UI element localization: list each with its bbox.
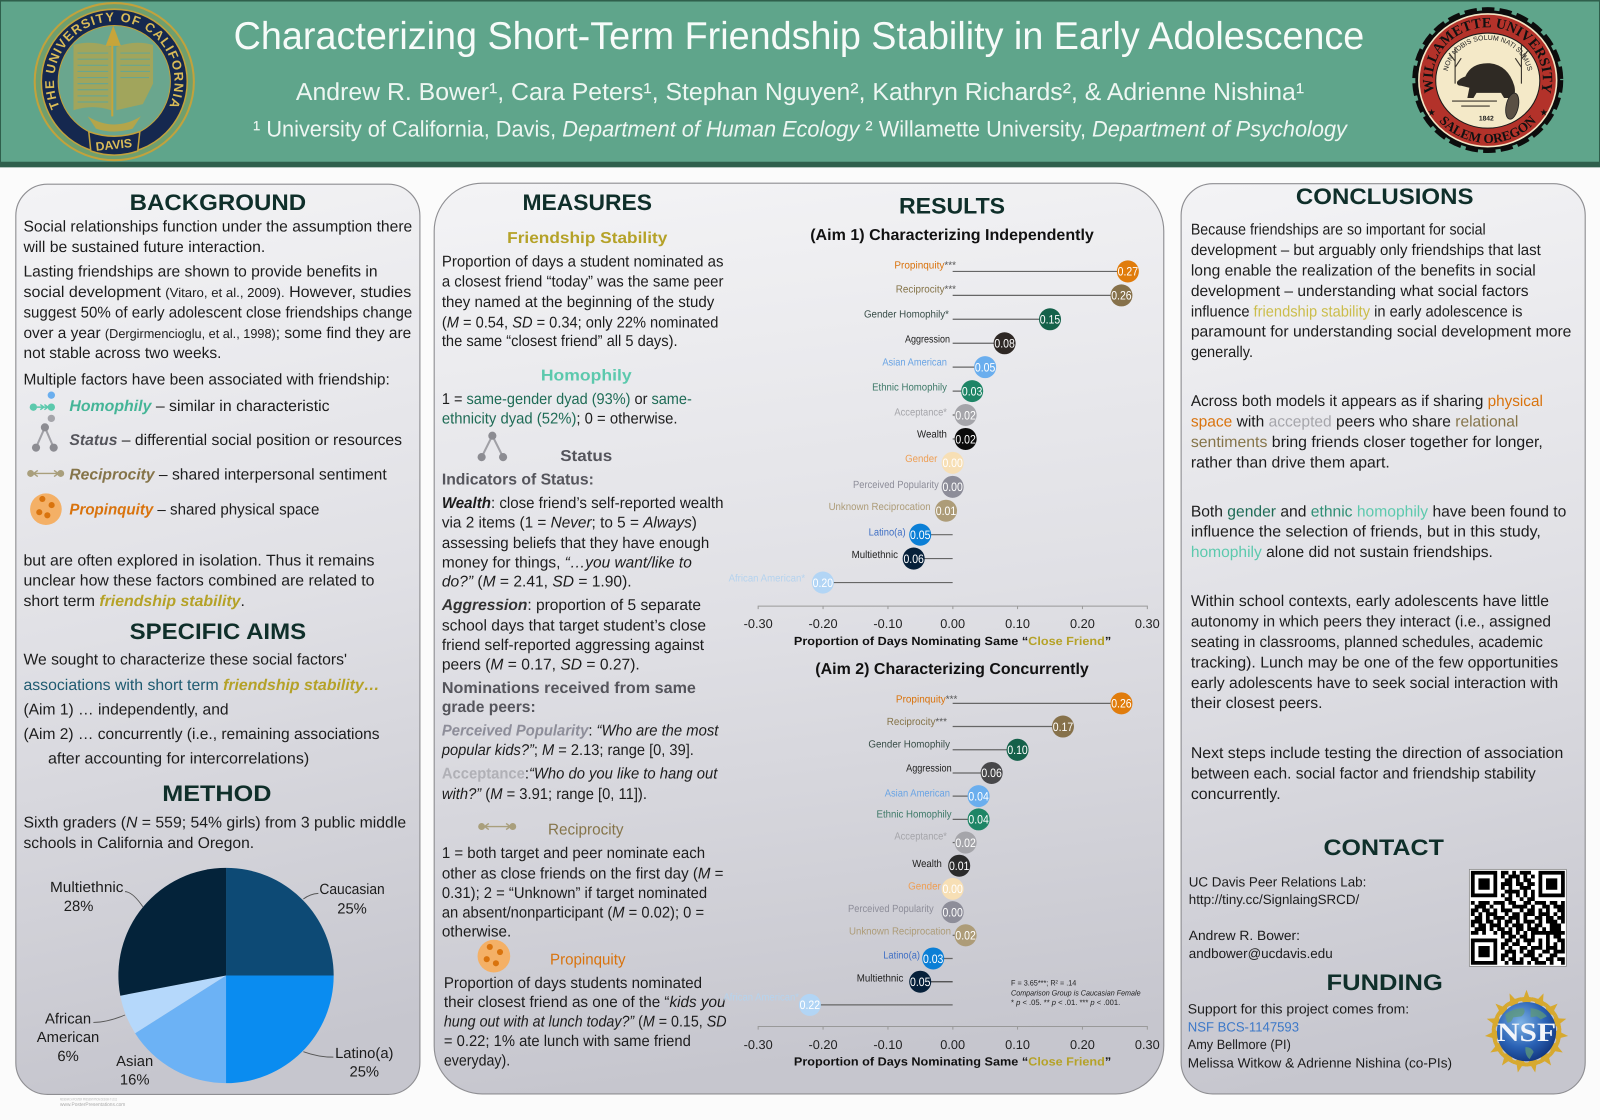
text: status indicators: popular kids?”; M = 2.13; range [0, 39]. xyxy=(441,742,694,759)
text: conclusion 2: sentiments bring friends closer together for longer, xyxy=(1191,434,1543,451)
text: friendship stability xyxy=(442,253,724,350)
pie labels: 6% xyxy=(57,1049,79,1065)
text: conclusion 2: rather than drive them apart. xyxy=(1191,454,1390,471)
text: status indicators: Indicators of Status: xyxy=(442,471,594,489)
text: conclusion 5: concurrently. xyxy=(1191,786,1281,803)
sub-heading: friendship stability: Friendship Stability xyxy=(507,230,668,247)
text: conclusion 2 xyxy=(1191,393,1543,471)
row: reciprocity: Reciprocity*** xyxy=(887,717,947,728)
heading: aim 1 chart: (Aim 1) Characterizing Independently xyxy=(810,227,1094,244)
text: friendship stability: (M = 0.54, SD = 0.34; only 22% nominated xyxy=(442,314,718,332)
row: propinquity: Propinquity*** xyxy=(894,261,956,272)
text: status indicators: money for things, “…you want/like to xyxy=(442,554,692,571)
logo: Willamette University seal: NON NOBIS SOLUM NATI SUMUS xyxy=(1443,35,1532,71)
text: conclusion 5: between each. social factor and friendship stability xyxy=(1191,765,1536,783)
panel: right column xyxy=(1181,184,1585,1094)
text: reciprocity: an absent/nonparticipant (M = 0.02); 0 = xyxy=(442,904,704,921)
footer credit xyxy=(60,1097,125,1108)
row: asian american xyxy=(882,356,996,378)
x axis aim 1: 0.00 xyxy=(940,617,965,631)
text: method xyxy=(23,814,406,852)
pie labels: American xyxy=(37,1030,99,1046)
row: ethnic homophily: 0.03 xyxy=(962,384,983,398)
x axis aim 1: 0.30 xyxy=(1135,617,1160,631)
row: perceived popularity xyxy=(853,476,964,498)
text: conclusion 3: Both gender and ethnic homophily have been found to xyxy=(1191,503,1566,520)
row: acceptance xyxy=(894,832,977,854)
text: conclusion 1 xyxy=(1191,221,1571,361)
logo: Willamette University seal: ★ xyxy=(1428,107,1436,117)
text: propinquity: everyday). xyxy=(444,1052,510,1069)
x axis aim 2: Proportion of Days Nominating Same “ Close Friend ” xyxy=(794,1056,1111,1068)
text: background paragraphs: will be sustained future interaction. xyxy=(22,239,265,256)
row: wealth xyxy=(912,855,970,877)
row: wealth: Wealth xyxy=(917,429,947,440)
factor: reciprocity: Reciprocity – shared interpersonal sentiment xyxy=(69,466,387,484)
text: background paragraphs: social development (Vitaro, et al., 2009). However, studies xyxy=(23,284,412,301)
text: conclusion 4: autonomy in which peers they interact (i.e., assigned xyxy=(1191,613,1551,631)
logo: Willamette University seal: WILLAMETTE UNIVERSITY xyxy=(1422,18,1552,94)
text: conclusion 1: development – but arguably only friendships that last xyxy=(1191,242,1542,259)
chart: aim 1 lollipop xyxy=(729,260,1160,648)
text: propinquity: Proportion of days students nominated xyxy=(444,974,702,992)
row: unknown reciprocation: Unknown Reciprocation xyxy=(849,926,951,938)
x axis aim 2: -0.10 xyxy=(873,1038,903,1052)
text: propinquity: their closest friend as one of the “kids you xyxy=(444,994,726,1011)
text: conclusion 1: paramount for understanding social development more xyxy=(1191,323,1571,341)
text: funding details xyxy=(1188,1001,1452,1070)
slice: Multiethnic xyxy=(118,868,226,996)
heading: funding: FUNDING xyxy=(1327,969,1443,995)
row: latino xyxy=(869,524,953,546)
text: method: Sixth graders (N = 559; 54% girls) from 3 public middle xyxy=(23,814,406,832)
text: status indicators xyxy=(441,471,723,803)
row: perceived popularity: 0.00 xyxy=(942,480,963,494)
text: background paragraphs xyxy=(22,218,412,389)
pie labels: Multiethnic xyxy=(50,880,123,896)
row: african american: African American* xyxy=(723,992,799,1004)
text: funding details: NSF BCS-1147593 xyxy=(1188,1019,1299,1035)
icon: reciprocity arrows xyxy=(478,823,516,830)
text: conclusion 4 xyxy=(1191,593,1559,712)
text: status indicators: Aggression: proportion of 5 separate xyxy=(441,597,701,614)
pie labels: 16% xyxy=(120,1072,150,1089)
text: background paragraphs: suggest 50% of early adolescent close friendships change xyxy=(23,304,412,321)
row: reciprocity: 0.26 xyxy=(1111,288,1132,303)
row: acceptance: 0.02 xyxy=(955,408,976,422)
logo: Willamette University seal: ★ xyxy=(1540,107,1548,117)
text: isolation statement: but are often explored in isolation. Thus it remains xyxy=(23,552,375,569)
text: status indicators: school days that target student’s close xyxy=(442,617,706,635)
row: reciprocity: Reciprocity*** xyxy=(896,284,956,296)
row: gender homophily xyxy=(864,308,1061,330)
text: conclusion 4: seating in classrooms, planned schedules, academic xyxy=(1191,634,1543,651)
row: ethnic homophily xyxy=(877,808,990,830)
logo: Willamette University seal: SALEM OREGON xyxy=(1440,115,1536,143)
text: reciprocity xyxy=(442,845,724,941)
pie labels: African xyxy=(45,1011,91,1028)
row: ethnic homophily: 0.04 xyxy=(968,812,989,827)
text: contact details: andbower@ucdavis.edu xyxy=(1189,946,1333,961)
text: conclusion 3: homophily alone did not sustain friendships. xyxy=(1191,544,1493,561)
text: specific aims: We sought to characterize these social factors' xyxy=(23,651,347,668)
row: african american: 0.22 xyxy=(800,998,820,1012)
row: multiethnic: 0.06 xyxy=(903,552,924,566)
row: gender homophily: Gender Homophily xyxy=(868,739,951,750)
row: asian american: 0.05 xyxy=(975,360,996,374)
text: funding details: Amy Bellmore (PI) xyxy=(1188,1037,1291,1052)
text: homophily xyxy=(442,391,692,428)
row: acceptance: Acceptance* xyxy=(894,832,947,843)
row: aggression: Aggression xyxy=(905,334,950,345)
text: background paragraphs: over a year (Dergirmencioglu, et al., 1998); some find they are xyxy=(23,324,411,342)
text: conclusion 2: space with accepted peers who share relational xyxy=(1191,413,1518,431)
text: background paragraphs: Social relationships function under the assumption there xyxy=(23,218,412,236)
text: friendship stability: Proportion of days a student nominated as xyxy=(442,253,724,270)
text: funding details: Support for this project comes from: xyxy=(1188,1001,1409,1016)
x axis aim 2: -0.30 xyxy=(744,1038,773,1052)
logo: UC Davis seal xyxy=(34,2,195,162)
text: conclusion 1: development – understanding what social factors xyxy=(1191,283,1529,300)
row: aggression: Aggression xyxy=(906,763,952,774)
model statistics note xyxy=(1011,979,1141,1007)
text: status indicators: do?” (M = 2.41, SD = 1.90). xyxy=(442,573,632,591)
slice: Latino(a) xyxy=(226,976,334,1083)
x axis aim 1: -0.30 xyxy=(744,617,773,631)
panel: left column xyxy=(16,184,420,1094)
row: propinquity xyxy=(894,260,1139,282)
logo: NSF xyxy=(1484,990,1569,1074)
text: status indicators: Wealth: close friend’s self-reported wealth xyxy=(442,495,723,512)
row: gender: Gender xyxy=(908,882,941,893)
row: gender homophily: Gender Homophily* xyxy=(864,309,949,321)
row: african american xyxy=(729,572,953,594)
row: asian american: Asian American xyxy=(885,788,950,799)
text: status indicators: assessing beliefs that they have enough xyxy=(442,535,709,552)
text: status indicators: Perceived Popularity: “Who are the most xyxy=(442,722,719,740)
row: gender xyxy=(905,452,964,474)
text: method: schools in California and Oregon. xyxy=(23,835,254,852)
row: wealth: 0.01 xyxy=(949,859,970,873)
text: conclusion 4: Within school contexts, early adolescents have little xyxy=(1191,593,1549,610)
row: gender: 0.00 xyxy=(942,456,963,470)
text: contact details xyxy=(1189,874,1366,961)
title: Characterizing Short-Term Friendship Stability in Early Adolescence xyxy=(234,15,1364,58)
row: african american: African American* xyxy=(729,573,805,585)
icon: status tree xyxy=(32,423,58,452)
text: isolation statement: short term friendship stability. xyxy=(23,593,245,610)
row: gender: Gender xyxy=(905,454,938,465)
row: gender: 0.00 xyxy=(942,882,963,896)
text: conclusion 1: generally. xyxy=(1191,344,1253,361)
text: status indicators: with?” (M = 3.91; range [0, 11]). xyxy=(442,786,647,803)
sub-heading: homophily: Homophily xyxy=(541,367,632,385)
row: latino: 0.05 xyxy=(910,528,931,542)
text: conclusion 4: their closest peers. xyxy=(1191,695,1322,712)
x axis aim 1: Proportion of Days Nominating Same “ Close Friend ” xyxy=(794,636,1111,648)
text: status indicators: peers (M = 0.17, SD = 0.27). xyxy=(442,656,640,673)
row: latino: Latino(a) xyxy=(883,951,920,962)
icon: propinquity circle xyxy=(478,940,510,972)
factor: status xyxy=(32,423,402,452)
text: propinquity: = 0.22; 1% ate lunch with same friend xyxy=(444,1033,691,1050)
text: reciprocity: other as close friends on the first day (M = xyxy=(442,865,724,883)
row: gender homophily: 0.10 xyxy=(1007,743,1028,757)
pie labels: Caucasian xyxy=(319,882,385,898)
heading: contact: CONTACT xyxy=(1323,835,1444,860)
row: reciprocity: 0.17 xyxy=(1053,720,1073,734)
text: homophily: ethnicity dyad (52%); 0 = otherwise. xyxy=(442,410,678,428)
x axis aim 2: 0.30 xyxy=(1135,1038,1160,1052)
row: propinquity: 0.27 xyxy=(1118,264,1138,279)
row: ethnic homophily xyxy=(872,380,983,402)
logo: UC Davis seal: THE UNIVERSITY OF CALIFORNIA xyxy=(45,12,184,110)
row: unknown reciprocation xyxy=(849,924,977,946)
text: friendship stability: a closest friend “today” was the same peer xyxy=(442,273,723,291)
row: perceived popularity: 0.00 xyxy=(942,905,963,919)
text: friendship stability: the same “closest friend” all 5 days). xyxy=(442,333,678,350)
heading: conclusions: CONCLUSIONS xyxy=(1296,184,1473,209)
model statistics note: F = 3.65***; R² = .14 xyxy=(1011,979,1076,988)
row: perceived popularity: Perceived Popularity xyxy=(848,904,935,915)
text: conclusion 5 xyxy=(1191,745,1563,803)
row: aggression xyxy=(906,762,1003,784)
text: conclusion 1: long enable the realization of the benefits in social xyxy=(1191,262,1536,280)
text: status indicators: via 2 items (1 = Never; to 5 = Always) xyxy=(442,514,697,532)
slice: African American xyxy=(120,976,226,1033)
text: propinquity xyxy=(444,974,727,1069)
heading: method: METHOD xyxy=(162,781,271,806)
pie labels: Asian xyxy=(116,1054,153,1070)
row: propinquity: Propinquity*** xyxy=(896,694,957,706)
row: acceptance: Acceptance* xyxy=(894,407,947,418)
text: specific aims xyxy=(23,651,380,767)
heading: aim 2 chart: (Aim 2) Characterizing Concurrently xyxy=(815,661,1089,678)
icon: propinquity circle xyxy=(30,493,62,525)
x axis aim 1: -0.10 xyxy=(873,617,903,631)
row: ethnic homophily: Ethnic Homophily xyxy=(872,382,948,393)
row: unknown reciprocation xyxy=(829,500,957,522)
text: conclusion 3: influence the selection of friends, but in this study, xyxy=(1191,523,1541,541)
affiliations: ¹ University of California, Davis, Department of Human Ecology ² Willamette University, Department of Psychology xyxy=(253,116,1349,142)
row: aggression: 0.06 xyxy=(981,766,1002,780)
row: asian american: 0.04 xyxy=(968,789,989,803)
row: acceptance xyxy=(894,404,977,426)
x axis aim 1: 0.20 xyxy=(1070,617,1095,631)
footer credit: www.PosterPresentations.com xyxy=(60,1102,125,1108)
text: contact details: Andrew R. Bower: xyxy=(1189,928,1300,943)
text: specific aims: associations with short term friendship stability… xyxy=(23,677,380,694)
chart: aim 2 lollipop xyxy=(723,692,1160,1068)
row: latino: Latino(a) xyxy=(869,528,906,539)
text: funding details: Melissa Witkow & Adrienne Nishina (co-PIs) xyxy=(1188,1055,1452,1070)
row: multiethnic: Multiethnic xyxy=(857,973,903,985)
text: conclusion 3 xyxy=(1191,503,1566,561)
model statistics note: * p < .05. ** p < .01. *** p < .001. xyxy=(1011,998,1120,1007)
text: isolation statement: unclear how these factors combined are related to xyxy=(23,572,374,590)
factor: propinquity xyxy=(30,493,319,525)
icon: homophily dots xyxy=(30,392,55,422)
x axis aim 1: 0.10 xyxy=(1005,617,1030,631)
text: status indicators: Nominations received from same xyxy=(442,680,696,697)
text: conclusion 4: early adolescents have to seek social interaction with xyxy=(1191,674,1558,692)
row: asian american: Asian American xyxy=(882,357,947,368)
text: background paragraphs: Multiple factors have been associated with friendship: xyxy=(23,371,390,389)
row: ethnic homophily: Ethnic Homophily xyxy=(877,809,952,821)
row: propinquity: 0.26 xyxy=(1111,696,1132,711)
factor: status: Status – differential social position or resources xyxy=(69,432,402,449)
row: latino xyxy=(883,947,953,969)
logo: NSF: NSF xyxy=(1497,1017,1556,1047)
text: conclusion 1: Because friendships are so important for social xyxy=(1191,221,1486,239)
authors: Andrew R. Bower¹, Cara Peters¹, Stephan Nguyen², Kathryn Richards², & Adrienne Nishina¹ xyxy=(296,79,1304,106)
heading: background: BACKGROUND xyxy=(130,190,306,215)
row: multiethnic: Multiethnic xyxy=(852,550,898,561)
icon: status tree xyxy=(478,432,507,461)
factor: homophily xyxy=(30,392,330,422)
heading: measures: MEASURES xyxy=(522,190,652,215)
icon: QR code xyxy=(1469,869,1566,966)
text: conclusion 5: Next steps include testing the direction of association xyxy=(1191,745,1563,762)
row: reciprocity xyxy=(896,284,1132,306)
text: status indicators: friend self-reported aggressing against xyxy=(442,637,705,654)
sub-heading: reciprocity: Reciprocity xyxy=(548,821,624,839)
x axis aim 1: -0.20 xyxy=(809,617,838,631)
text: conclusion 2: Across both models it appears as if sharing physical xyxy=(1191,393,1543,410)
text: reciprocity: 0.31); 2 = “Unknown” if target nominated xyxy=(442,885,707,902)
panel: measures and results xyxy=(434,183,1164,1094)
x axis aim 2: 0.00 xyxy=(940,1038,965,1052)
icon: reciprocity arrows xyxy=(27,470,64,477)
row: multiethnic xyxy=(857,971,953,993)
text: specific aims: (Aim 2) … concurrently (i.e., remaining associations xyxy=(23,726,380,743)
sub-heading: propinquity: Propinquity xyxy=(550,951,626,968)
row: latino: 0.03 xyxy=(923,952,944,966)
text: specific aims: (Aim 1) … independently, and xyxy=(23,701,229,718)
text: reciprocity: 1 = both target and peer nominate each xyxy=(442,845,705,862)
text: status indicators: Acceptance:“Who do you like to hang out xyxy=(442,765,718,783)
pie chart: ethnicity xyxy=(37,868,393,1089)
x axis aim 2 xyxy=(744,1027,1160,1068)
x axis aim 2: 0.20 xyxy=(1070,1038,1095,1052)
sub-heading: status: Status xyxy=(560,448,612,465)
row: african american xyxy=(723,992,953,1016)
pie labels: 25% xyxy=(337,901,367,917)
row: wealth: 0.02 xyxy=(955,432,976,446)
logo: Willamette University seal: 1842 xyxy=(1479,115,1494,122)
logo: UC Davis seal: DAVIS xyxy=(95,136,133,154)
logo: Willamette University seal xyxy=(1412,7,1564,153)
factor: homophily: Homophily – similar in characteristic xyxy=(69,398,330,415)
pie labels: 25% xyxy=(349,1064,379,1081)
row: aggression: 0.08 xyxy=(994,336,1015,351)
text: homophily: 1 = same-gender dyad (93%) or same- xyxy=(442,391,692,408)
row: gender xyxy=(908,878,964,900)
row: gender homophily: 0.15 xyxy=(1040,312,1060,327)
heading: results: RESULTS xyxy=(899,193,1005,218)
row: acceptance: 0.02 xyxy=(955,836,976,850)
text: status indicators: grade peers: xyxy=(442,699,536,716)
text: propinquity: hung out with at lunch today?” (M = 0.15, SD xyxy=(444,1013,727,1031)
x axis aim 2: 0.10 xyxy=(1005,1038,1030,1052)
row: unknown reciprocation: 0.01 xyxy=(936,504,957,518)
heading: specific aims: SPECIFIC AIMS xyxy=(130,618,306,644)
row: wealth: Wealth xyxy=(912,859,942,870)
text: isolation statement xyxy=(23,552,375,610)
row: unknown reciprocation: Unknown Reciprocation xyxy=(829,502,931,513)
row: multiethnic: 0.05 xyxy=(910,975,931,989)
model statistics note: Comparison Group is Caucasian Female xyxy=(1011,988,1141,997)
slice: Caucasian xyxy=(226,868,334,976)
footer credit: RESEARCH POSTER PRESENTATION DESIGN © 2012 xyxy=(60,1097,117,1102)
pie labels: 28% xyxy=(64,899,93,915)
row: reciprocity xyxy=(887,716,1074,738)
row: wealth xyxy=(917,428,977,450)
pie labels xyxy=(37,880,393,1089)
row: asian american xyxy=(885,785,990,807)
row: perceived popularity xyxy=(848,901,964,923)
row: perceived popularity: Perceived Popularity xyxy=(853,480,940,491)
text: conclusion 1: influence friendship stability in early adolescence is xyxy=(1191,303,1523,320)
slice: Asian xyxy=(135,976,226,1083)
row: aggression xyxy=(905,332,1016,354)
x axis aim 2: -0.20 xyxy=(809,1038,838,1052)
factor: propinquity: Propinquity – shared physical space xyxy=(69,501,319,518)
row: unknown reciprocation: 0.02 xyxy=(955,928,976,943)
x axis aim 1 xyxy=(744,606,1160,648)
text: friendship stability: they named at the beginning of the study xyxy=(442,294,715,311)
text: contact details: UC Davis Peer Relations Lab: xyxy=(1189,874,1366,890)
row: african american: 0.20 xyxy=(813,576,833,590)
text: background paragraphs: Lasting friendships are shown to provide benefits in xyxy=(23,263,378,281)
row: gender homophily xyxy=(868,739,1029,761)
text: background paragraphs: not stable across two weeks. xyxy=(23,345,221,362)
text: conclusion 4: tracking). Lunch may be one of the few opportunities xyxy=(1191,654,1559,671)
row: multiethnic xyxy=(852,548,953,570)
row: propinquity xyxy=(896,692,1132,714)
pie labels: Latino(a) xyxy=(335,1046,393,1062)
text: reciprocity: otherwise. xyxy=(442,923,511,941)
text: specific aims: after accounting for intercorrelations) xyxy=(48,750,309,767)
header banner xyxy=(0,0,1600,168)
text: contact details: http://tiny.cc/SignlaingSRCD/ xyxy=(1189,892,1360,907)
